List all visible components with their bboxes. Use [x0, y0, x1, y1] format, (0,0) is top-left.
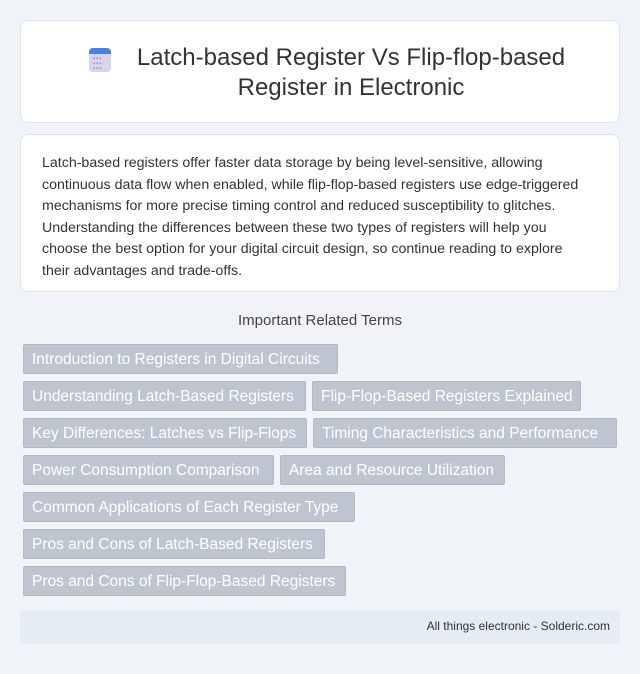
heading: related terms: Important Related Terms: [238, 312, 402, 329]
tag: Pros and Cons of Latch-Based Registers: [32, 536, 313, 553]
tag: [23, 381, 306, 411]
description text: Understanding the differences between these two types of registers will help you: [42, 220, 546, 236]
description text: continuous data flow when enabled, while flip-flop-based registers use edge-triggered: [42, 176, 578, 192]
description text: their advantages and trade-offs.: [42, 262, 242, 278]
footer text: All things electronic - Solderic.com: [427, 619, 610, 633]
tag: [23, 344, 338, 374]
tag: Power Consumption Comparison: [32, 462, 259, 479]
description text: choose the best option for your digital circuit design, so continue reading to explore: [42, 241, 563, 257]
tag: [23, 492, 355, 522]
description text: mechanisms for more precise timing control and reduced susceptibility to glitches.: [42, 198, 555, 214]
tag: Area and Resource Utilization: [289, 462, 494, 479]
tag: Timing Characteristics and Performance: [322, 425, 598, 442]
tag: [280, 455, 505, 485]
description text: [42, 155, 578, 278]
tag: [23, 529, 325, 559]
title: Latch-based Register Vs Flip-flop-based Register in Electronic: [137, 44, 565, 101]
icon: calendar: [89, 48, 111, 72]
tag: Flip-Flop-Based Registers Explained: [321, 388, 573, 405]
tag: [23, 418, 307, 448]
tag: Key Differences: Latches vs Flip-Flops: [32, 425, 296, 442]
tag: [23, 455, 274, 485]
tag: Common Applications of Each Register Type: [32, 499, 338, 516]
tag: [313, 418, 617, 448]
icon: calendar: ▪▪▪: [93, 61, 102, 67]
icon: calendar: ▪▪▪: [93, 66, 102, 72]
tag: Understanding Latch-Based Registers: [32, 388, 294, 405]
description card: [20, 134, 620, 292]
tag: Pros and Cons of Flip-Flop-Based Registers: [32, 573, 335, 590]
icon: calendar: ▪▪▪: [93, 56, 102, 62]
tag: Introduction to Registers in Digital Circuits: [32, 351, 320, 368]
tag: [23, 566, 346, 596]
description text: Latch-based registers offer faster data storage by being level-sensitive, allowing: [42, 155, 543, 171]
footer: [20, 610, 620, 644]
tag: [312, 381, 581, 411]
title card: [20, 20, 620, 123]
